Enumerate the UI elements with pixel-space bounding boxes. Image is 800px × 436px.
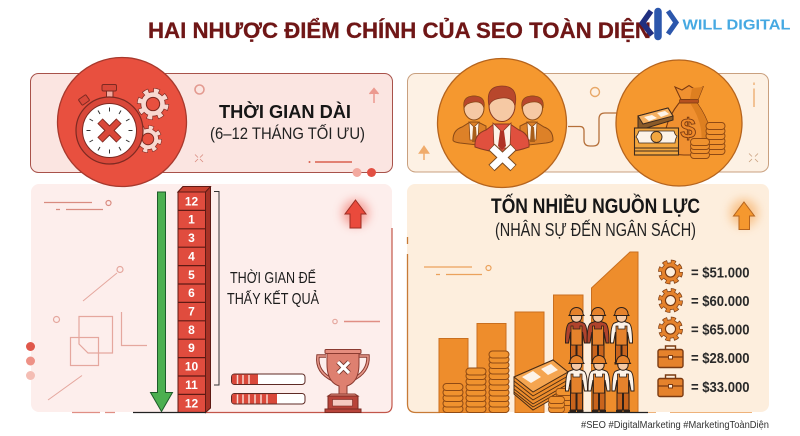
- month labels: 7: [188, 304, 195, 318]
- month labels: 8: [188, 323, 195, 337]
- text: resources heading: TỐN NHIỀU NGUỒN LỰC: [491, 192, 700, 218]
- icon: stacked banknotes behind: [638, 108, 673, 129]
- month labels: 12: [185, 194, 198, 208]
- month labels: [185, 194, 198, 410]
- logo: Will Digital: [642, 11, 790, 36]
- legend item: gear 60.000: = $60.000: [691, 294, 750, 310]
- icon: short coin stack: [690, 138, 710, 158]
- month labels: 3: [188, 231, 195, 245]
- baseline under column: [133, 412, 206, 414]
- icon: workers back row: [566, 308, 632, 364]
- panel: top right people and money: [408, 74, 768, 172]
- icon: large gear: [140, 91, 166, 117]
- month labels: 12: [185, 396, 198, 410]
- icon: team with cross in orange circle: [438, 58, 566, 188]
- icon: small gear: [137, 128, 159, 150]
- icon: central person in red suit: [475, 86, 529, 152]
- logo wordmark: WILL DIGITAL: [682, 16, 790, 34]
- progress bars: [232, 374, 305, 404]
- hashtags: #SEO #DigitalMarketing #MarketingToànDiện: [581, 420, 769, 431]
- arrow: green downward timeline: [150, 192, 172, 412]
- month labels: 1: [188, 212, 195, 226]
- icon: cash stack: [514, 360, 568, 410]
- text: resources heading: (NHÂN SỰ ĐẾN NGÂN SÁCH): [495, 219, 696, 240]
- month labels: 10: [185, 360, 198, 374]
- icon: workers front row: [566, 356, 648, 412]
- legend item: gear 65.000: = $65.000: [691, 322, 750, 338]
- legend item: gear 51.000: = $51.000: [691, 266, 750, 282]
- progress bar 2: [232, 394, 305, 404]
- month column: [178, 186, 210, 412]
- icon: small coin stacks: [548, 388, 572, 412]
- connector line between orange circles: [568, 113, 618, 146]
- icon: banknote stack front: [634, 128, 678, 155]
- icon: orange up arrow with glow: [730, 199, 758, 230]
- text: resources heading: [491, 192, 700, 240]
- legend item: briefcase 28.000: = $28.000: [691, 351, 750, 367]
- text: time to see results: THẤY KẾT QUẢ: [227, 289, 319, 308]
- month labels: 5: [188, 268, 195, 282]
- legend: cost list: [658, 262, 750, 396]
- panel: bottom left time chart: [26, 184, 392, 412]
- icon: white cross: [492, 147, 514, 168]
- text: time to see results: THỜI GIAN ĐỂ: [230, 268, 316, 287]
- icon: red up arrow with glow: [342, 200, 368, 228]
- month labels: 4: [188, 250, 195, 264]
- panel: top left long time: [30, 74, 392, 177]
- icon: right colleague: [520, 96, 553, 146]
- icon: coin stacks: [443, 351, 509, 412]
- icon: tall coin stack: [706, 122, 725, 154]
- month labels: 11: [185, 378, 198, 392]
- month labels: 9: [188, 341, 195, 355]
- icon: left colleague: [453, 96, 486, 146]
- legend item: briefcase 33.000: = $33.000: [691, 380, 750, 396]
- icon: stopwatch and gears in red circle: [58, 58, 186, 186]
- text: time to see results: [227, 268, 319, 308]
- logo mark: [642, 11, 676, 36]
- progress bar 1: [232, 374, 305, 384]
- bracket: [214, 192, 219, 385]
- text: long time heading: (6–12 THÁNG TỐI ƯU): [210, 123, 365, 143]
- panel: bottom right resources: [407, 184, 769, 412]
- text: long time heading: [210, 101, 365, 143]
- title: HAI NHƯỢC ĐIỂM CHÍNH CỦA SEO TOÀN DIỆN: [148, 18, 651, 43]
- icon: trophy with cross: [318, 350, 368, 412]
- icon: money bag: $: [680, 113, 696, 144]
- icon: stopwatch: [76, 84, 143, 164]
- month labels: 6: [188, 286, 195, 300]
- text: long time heading: THỜI GIAN DÀI: [219, 101, 351, 122]
- bar chart: rising orange bars: [439, 252, 638, 412]
- icon: money bag and cash in orange circle: [616, 60, 742, 186]
